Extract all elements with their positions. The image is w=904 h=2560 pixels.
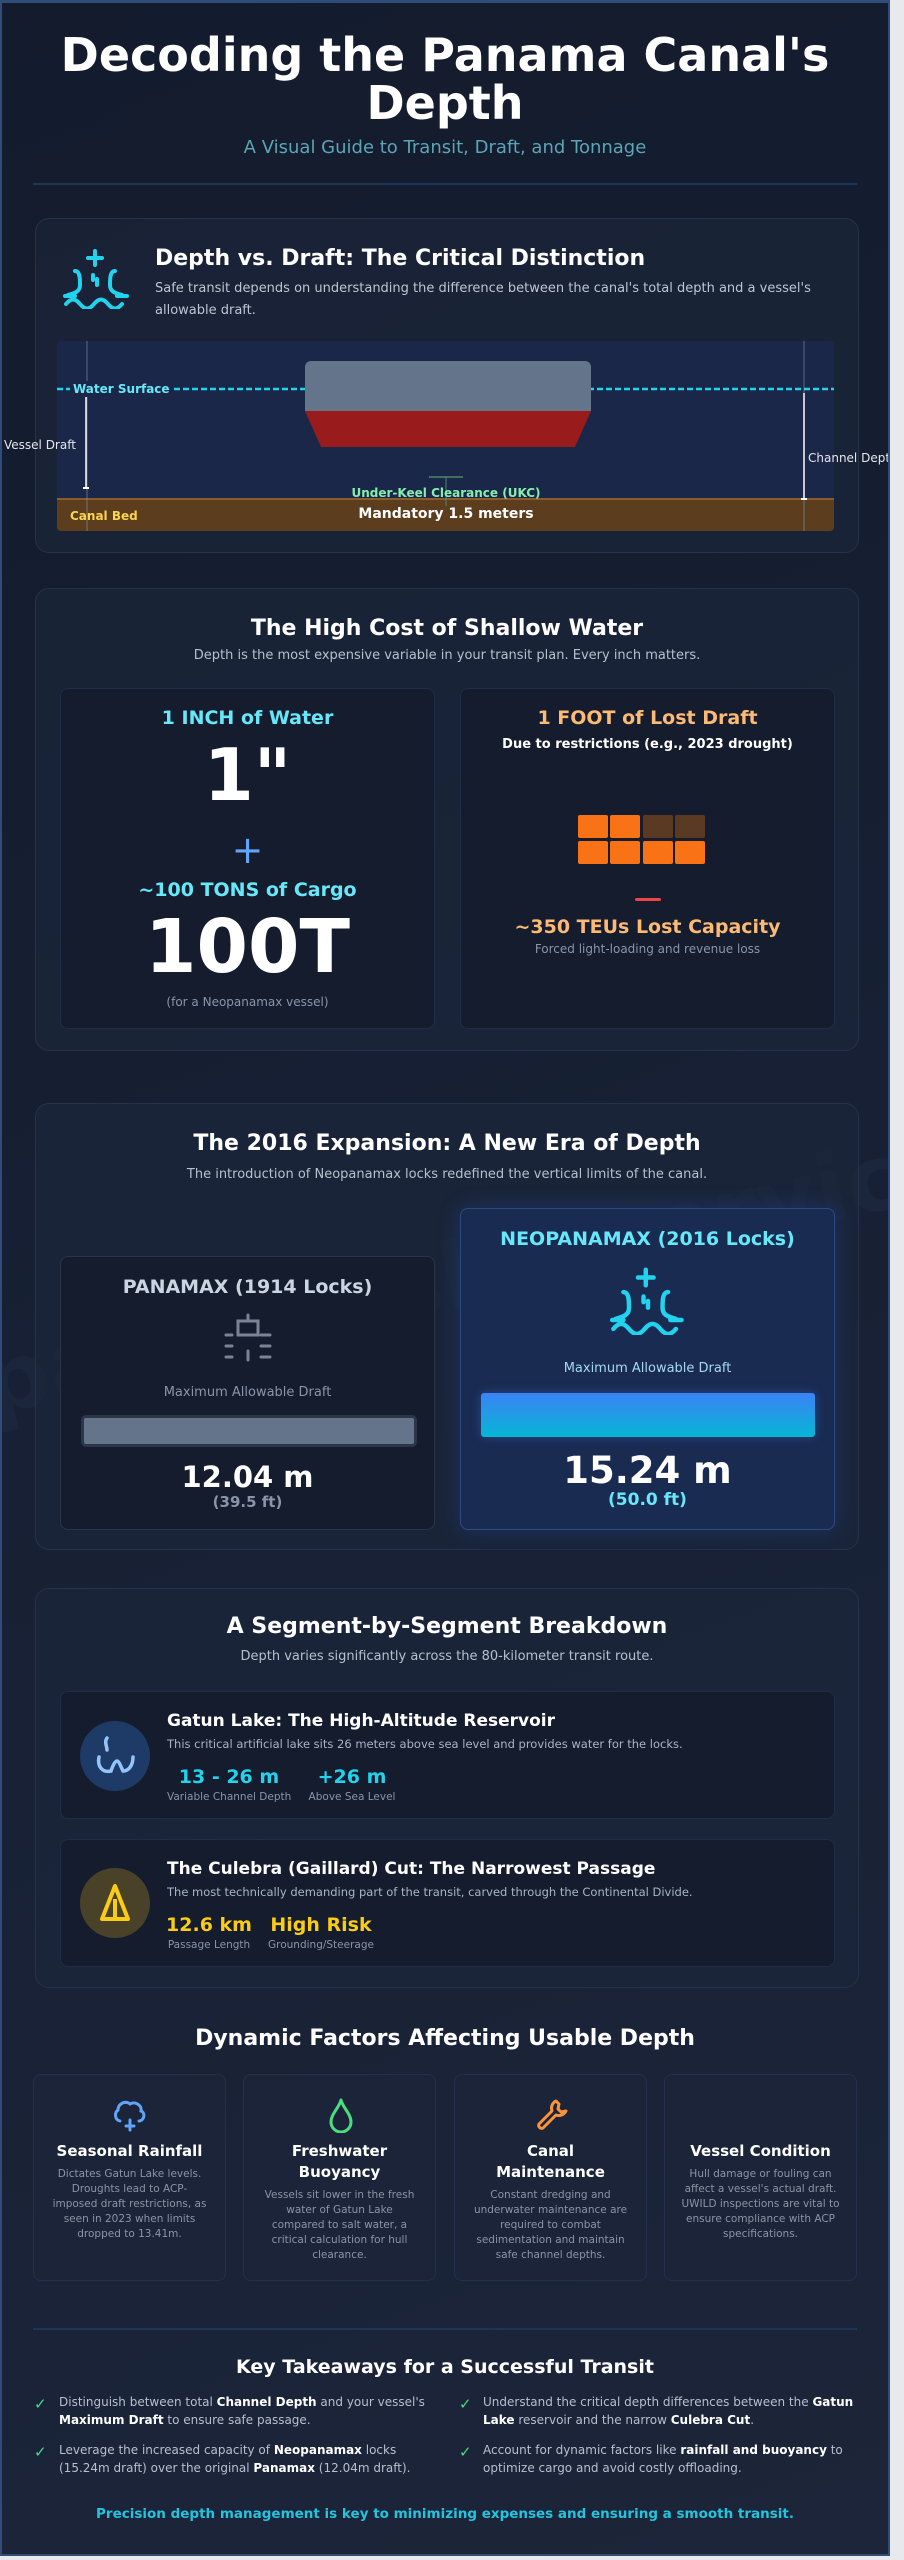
card: seasonal rainfall bbox=[33, 2074, 226, 2281]
takeaways list bbox=[34, 2395, 853, 2475]
card: neopanamax: (50.0 ft) bbox=[608, 1490, 687, 1510]
label: water surface: Water Surface bbox=[73, 382, 170, 396]
card: 1 inch bbox=[60, 688, 435, 1029]
card: neopanamax: 15.24 m bbox=[563, 1449, 732, 1492]
heading: A Segment-by-Segment Breakdown bbox=[227, 1614, 667, 1639]
card: panamax: PANAMAX (1914 Locks) bbox=[123, 1276, 372, 1298]
heading: The 2016 Expansion: A New Era of Depth bbox=[193, 1131, 701, 1156]
icon: vessel in water bbox=[63, 249, 129, 309]
card: culebra cut: Passage Length bbox=[168, 1939, 250, 1951]
card: freshwater buoyancy: Freshwater bbox=[292, 2142, 387, 2160]
card: seasonal rainfall: Dictates Gatun Lake levels. Droughts lead to ACP-imposed draft restrictions, as seen in 2023 when limits dropped to 13.41m. bbox=[53, 2168, 206, 2240]
card: gatun lake: This critical artificial lake sits 26 meters above sea level and provides water for the locks. bbox=[167, 1737, 683, 1751]
card: gatun lake bbox=[60, 1691, 835, 1819]
card: 1 inch: (for a Neopanamax vessel) bbox=[166, 995, 329, 1009]
icon: container grid bbox=[578, 815, 705, 864]
card: 1 foot bbox=[460, 688, 835, 1029]
card: 1 foot: Forced light-loading and revenue loss bbox=[535, 942, 760, 956]
card: gatun lake: Variable Channel Depth bbox=[167, 1791, 291, 1803]
title: Decoding the Panama Canal's bbox=[61, 28, 829, 82]
icon: lake bbox=[80, 1721, 150, 1791]
label: UKC: Under-Keel Clearance (UKC) bbox=[352, 486, 540, 500]
card: gatun lake: Gatun Lake: The High-Altitude Reservoir bbox=[167, 1711, 555, 1731]
card: culebra cut: The Culebra (Gaillard) Cut: The Narrowest Passage bbox=[167, 1859, 655, 1879]
takeaway 4: ✓ bbox=[459, 2443, 472, 2461]
card: vessel condition bbox=[664, 2074, 857, 2281]
panel: depth vs draft bbox=[35, 218, 859, 553]
card: neopanamax bbox=[460, 1208, 835, 1530]
card: panamax: 12.04 m bbox=[181, 1460, 314, 1494]
subtitle: Depth varies significantly across the 80-kilometer transit route. bbox=[240, 1649, 654, 1664]
card: freshwater buoyancy bbox=[243, 2074, 436, 2281]
card: canal maintenance bbox=[454, 2074, 647, 2281]
heading: The High Cost of Shallow Water bbox=[251, 616, 643, 641]
label: mandatory: Mandatory 1.5 meters bbox=[358, 506, 534, 522]
card: canal maintenance: Constant dredging and underwater maintenance are required to combat sedimentation and maintain safe channel depths. bbox=[474, 2189, 627, 2261]
card: vessel condition: Vessel Condition bbox=[690, 2142, 831, 2160]
card: gatun lake: Above Sea Level bbox=[309, 1791, 395, 1803]
title: Depth bbox=[366, 76, 524, 130]
card: 1 inch: 1" bbox=[204, 733, 291, 817]
description: Safe transit depends on understanding the difference between the canal's total depth and a vessel's allowable draft. bbox=[155, 281, 811, 318]
icon: warning bbox=[80, 1868, 150, 1938]
card: freshwater buoyancy: Buoyancy bbox=[299, 2163, 380, 2181]
card: culebra cut: The most technically demanding part of the transit, carved through the Continental Divide. bbox=[167, 1885, 693, 1899]
icon: lock gray bbox=[224, 1314, 272, 1362]
takeaway 4: Account for dynamic factors like rainfall and buoyancy to optimize cargo and avoid costly offloading. bbox=[483, 2443, 843, 2475]
card: 1 foot: ~350 TEUs Lost Capacity bbox=[514, 916, 781, 938]
card: 1 inch: ~100 TONS of Cargo bbox=[138, 879, 357, 901]
card: culebra cut: Grounding/Steerage bbox=[268, 1939, 374, 1951]
takeaway 3: Leverage the increased capacity of Neopanamax locks (15.24m draft) over the original Panamax (12.04m draft). bbox=[59, 2443, 410, 2475]
heading: Depth vs. Draft: The Critical Distinction bbox=[155, 246, 645, 271]
card: gatun lake: +26 m bbox=[318, 1766, 386, 1788]
icon: cloud rain bbox=[114, 2100, 146, 2132]
card: panamax: Maximum Allowable Draft bbox=[164, 1385, 331, 1400]
title bbox=[61, 28, 829, 130]
card: seasonal rainfall: Seasonal Rainfall bbox=[57, 2142, 202, 2160]
takeaway 2: ✓ bbox=[459, 2395, 472, 2413]
card: culebra cut: 12.6 km bbox=[166, 1914, 252, 1936]
panel: segment breakdown bbox=[35, 1588, 859, 1988]
heading: key takeaways: Key Takeaways for a Successful Transit bbox=[236, 2356, 654, 2378]
card: 1 foot: Due to restrictions (e.g., 2023 drought) bbox=[502, 737, 793, 752]
card: freshwater buoyancy: Vessels sit lower in the fresh water of Gatun Lake compared to salt water, a critical calculation for hull clearance. bbox=[265, 2189, 414, 2261]
label: vessel draft: Vessel Draft bbox=[4, 438, 76, 452]
card: neopanamax: NEOPANAMAX (2016 Locks) bbox=[500, 1228, 795, 1250]
subtitle: A Visual Guide to Transit, Draft, and Tonnage bbox=[244, 137, 646, 158]
card: panamax bbox=[60, 1256, 435, 1530]
card: 1 inch: 100T bbox=[145, 904, 350, 990]
takeaway 1: ✓ bbox=[34, 2395, 47, 2413]
label: canal bed: Canal Bed bbox=[70, 509, 138, 523]
card: neopanamax: Maximum Allowable Draft bbox=[564, 1361, 731, 1376]
card: panamax: (39.5 ft) bbox=[213, 1493, 282, 1511]
takeaway 3: ✓ bbox=[34, 2443, 47, 2461]
card: vessel condition: Hull damage or fouling can affect a vessel's actual draft. UWILD inspections are vital to ensure compliance with ACP specifications. bbox=[681, 2168, 840, 2240]
card: 1 inch: + bbox=[232, 828, 263, 872]
subtitle: The introduction of Neopanamax locks redefined the vertical limits of the canal. bbox=[187, 1167, 707, 1182]
panel: 2016 expansion bbox=[35, 1103, 859, 1550]
card: 1 inch: 1 INCH of Water bbox=[162, 707, 333, 729]
subtitle: Depth is the most expensive variable in your transit plan. Every inch matters. bbox=[194, 648, 700, 663]
card: canal maintenance: Canal bbox=[527, 2142, 574, 2160]
heading: dynamic factors: Dynamic Factors Affecting Usable Depth bbox=[195, 2026, 695, 2051]
panel: high cost of shallow water bbox=[35, 588, 859, 1051]
icon: drop bbox=[330, 2098, 352, 2133]
card: canal maintenance: Maintenance bbox=[496, 2163, 605, 2181]
chart: depth diagram bbox=[57, 341, 834, 531]
card: culebra cut bbox=[60, 1839, 835, 1967]
footer callout: Precision depth management is key to minimizing expenses and ensuring a smooth transit. bbox=[96, 2506, 794, 2522]
icon: vessel cyan bbox=[610, 1268, 684, 1335]
takeaway 2: Understand the critical depth differences between the Gatun Lake reservoir and the narrow Culebra Cut. bbox=[483, 2395, 853, 2427]
card: 1 foot: 1 FOOT of Lost Draft bbox=[537, 707, 758, 729]
card: culebra cut: High Risk bbox=[270, 1914, 372, 1936]
icon: wrench bbox=[537, 2100, 568, 2130]
card: gatun lake: 13 - 26 m bbox=[179, 1766, 279, 1788]
takeaway 1: Distinguish between total Channel Depth and your vessel's Maximum Draft to ensure safe passage. bbox=[59, 2395, 425, 2427]
